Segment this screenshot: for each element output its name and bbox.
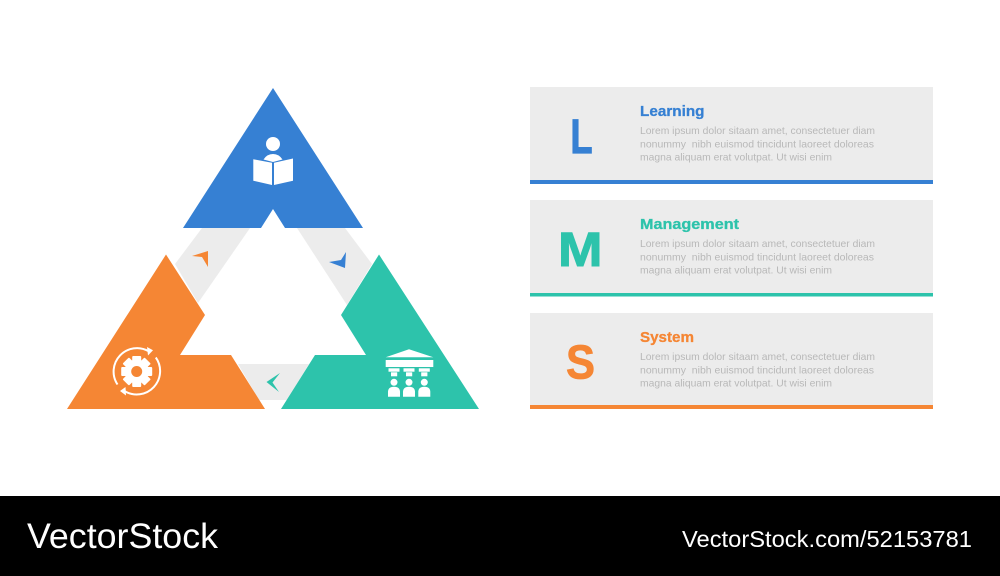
icon: institution with people — [386, 349, 433, 397]
text block: System: Lorem ipsum dolor sitaam amet, consectetuer diam — [640, 351, 875, 363]
arrow: teal — [266, 373, 280, 392]
text block: Management: nonummy nibh euismod tincidunt laoreet doloreas — [640, 252, 874, 264]
heading: Management: Management — [640, 216, 739, 233]
heading: Learning: Learning — [640, 103, 704, 120]
text block: Management: Lorem ipsum dolor sitaam amet, consectetuer diam — [640, 238, 875, 250]
panel: Management — [530, 200, 933, 296]
footer url text: VectorStock.com/52153781 — [682, 526, 972, 552]
connector band: left — [175, 228, 250, 303]
triangle cycle diagram — [67, 88, 479, 409]
text block: System: nonummy nibh euismod tincidunt laoreet doloreas — [640, 364, 874, 376]
text block: Management: magna aliquam erat volutpat. Ut wisi enim — [640, 264, 832, 276]
teal triangle segment — [281, 254, 479, 409]
footer logo text: VectorStock — [27, 517, 219, 556]
text block: System: magna aliquam erat volutpat. Ut wisi enim — [640, 378, 832, 390]
icon: gear with cycle arrows — [114, 347, 160, 396]
blue triangle segment — [183, 88, 363, 228]
text block: Learning: nonummy nibh euismod tincidunt laoreet doloreas — [640, 138, 874, 150]
connector band: right — [297, 228, 372, 305]
footer banner — [0, 496, 1000, 576]
orange triangle segment — [67, 254, 265, 409]
connector band: bottom — [238, 364, 309, 400]
icon: person reading book — [253, 137, 293, 185]
text block: Learning: Lorem ipsum dolor sitaam amet, consectetuer diam — [640, 125, 875, 137]
text block: System — [640, 351, 875, 390]
text block: Management — [640, 238, 875, 276]
arrow: orange — [192, 251, 208, 267]
panel: System — [530, 313, 933, 409]
heading: System: System — [640, 329, 694, 346]
text block: Learning — [640, 125, 875, 164]
text block: Learning: magna aliquam erat volutpat. Ut wisi enim — [640, 152, 832, 164]
arrow: blue — [329, 252, 346, 268]
panel: Learning — [530, 87, 933, 184]
letter S: S — [566, 336, 595, 390]
letter M: M — [558, 224, 602, 277]
letter L: L — [570, 111, 592, 164]
